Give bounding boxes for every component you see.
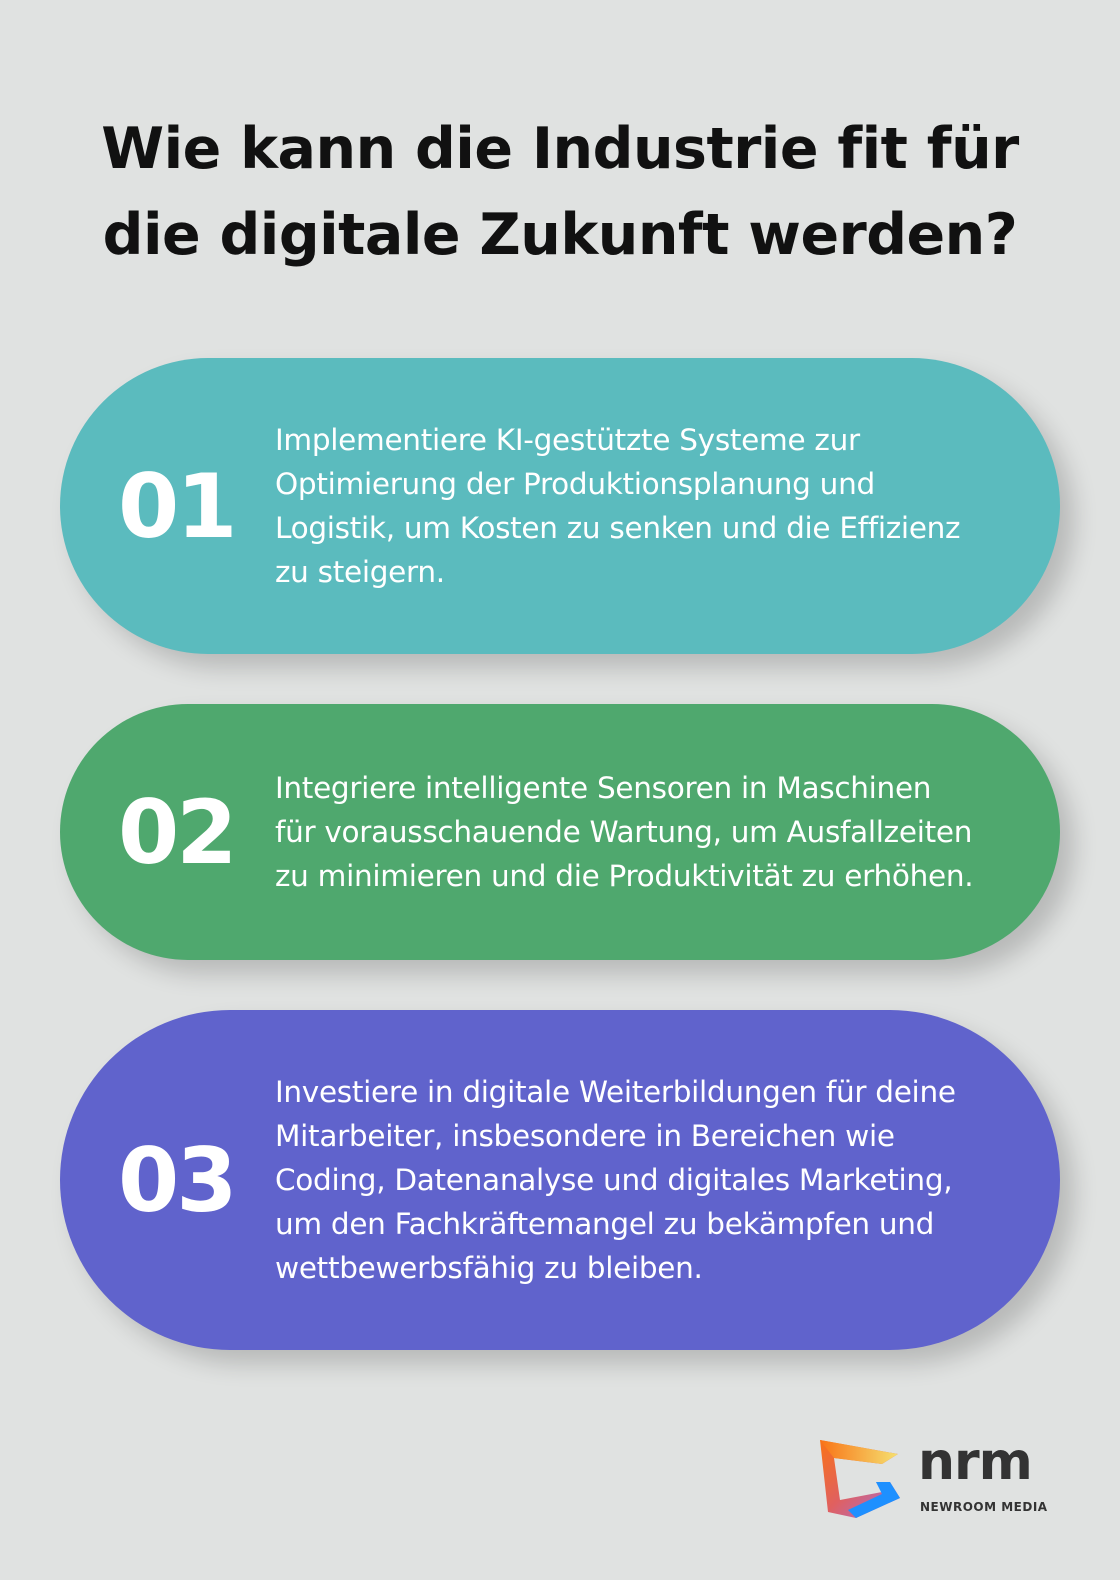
text 02: für vorausschauende Wartung, um Ausfallzeiten [275, 815, 972, 849]
text 03: um den Fachkräftemangel zu bekämpfen und [275, 1207, 934, 1241]
icon: logo mark [820, 1440, 900, 1518]
text 03: Coding, Datenanalyse und digitales Marketing, [275, 1163, 952, 1197]
text 02 [275, 771, 973, 893]
number 03: 03 [118, 1128, 234, 1232]
number 01: 01 [118, 454, 234, 558]
text 03: Mitarbeiter, insbesondere in Bereichen wie [275, 1119, 895, 1153]
title: Wie kann die Industrie fit für [101, 116, 1019, 182]
panel: step 02 [60, 704, 1060, 960]
logo text: nrm [918, 1432, 1032, 1492]
panel: step 03 [60, 1010, 1060, 1350]
title [101, 116, 1020, 268]
logo [820, 1432, 1048, 1518]
text 01: zu steigern. [275, 555, 445, 589]
text 03 [275, 1075, 956, 1285]
panel: step 01 [60, 358, 1060, 654]
text 01: Logistik, um Kosten zu senken und die Effizienz [275, 511, 960, 545]
text 01: Implementiere KI-gestützte Systeme zur [275, 423, 860, 457]
text 02: zu minimieren und die Produktivität zu erhöhen. [275, 859, 973, 893]
text 03: Investiere in digitale Weiterbildungen für deine [275, 1075, 956, 1109]
text 03: wettbewerbsfähig zu bleiben. [275, 1251, 703, 1285]
text 02: Integriere intelligente Sensoren in Maschinen [275, 771, 931, 805]
text 01 [275, 423, 960, 589]
title: die digitale Zukunft werden? [103, 202, 1017, 268]
number 02: 02 [118, 780, 234, 884]
text 01: Optimierung der Produktionsplanung und [275, 467, 875, 501]
logo: NEWROOM MEDIA [920, 1500, 1048, 1514]
